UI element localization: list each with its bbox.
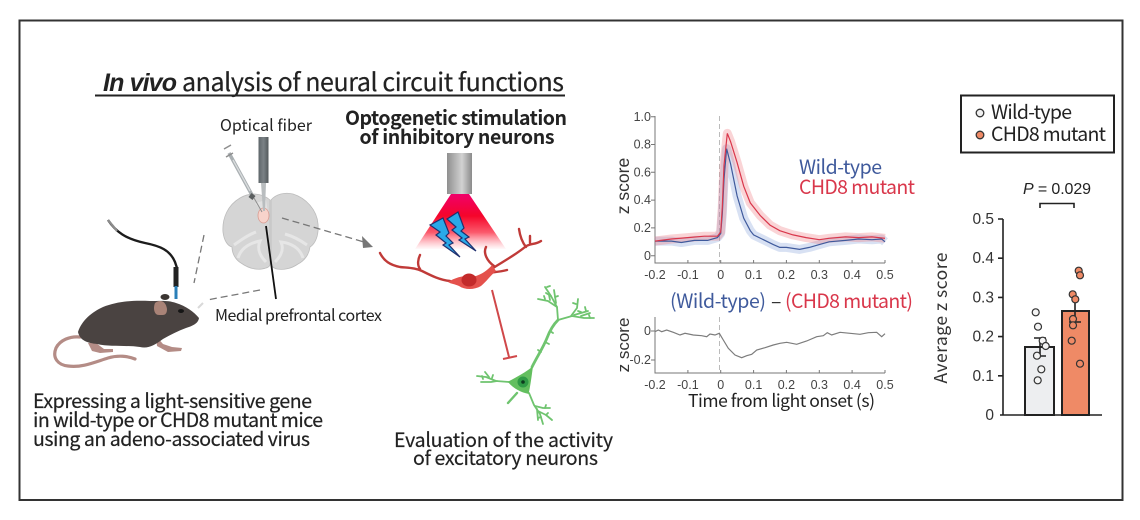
difference chart [614,285,913,413]
icon: lightning bolts [430,212,476,257]
heading: optogenetic stimulation [345,102,567,150]
y tick labels: 0.2 [634,221,651,235]
y tick labels [634,110,651,263]
y tick labels: 0.2 [972,328,994,346]
icon: brain coronal section [223,193,318,269]
icon: syringe [224,145,262,212]
x tick labels: 0 [717,378,724,392]
mutant error band [655,133,885,241]
x tick labels: 0.2 [778,268,795,282]
x tick labels: -0.2 [644,378,666,392]
arrow: brain to optogenetic stimulation [282,218,373,248]
y tick labels: 0 [985,407,994,424]
x tick labels: 0.3 [811,268,828,282]
error bars [1034,302,1081,356]
x tick labels: -0.2 [644,268,666,282]
title: In vivo [103,69,177,97]
mutant label: CHD8 mutant [991,118,1107,147]
line chart: z score over time [613,110,916,282]
wild-type mean [655,149,885,249]
caption: evaluation: of excitatory neurons [413,442,598,471]
wild-type data points [1032,309,1049,384]
y axis title: Average z score [928,252,953,384]
light cone [415,194,506,249]
y tick labels [972,211,994,424]
icon: optical cable [108,220,178,299]
wild-type label: Wild-type [991,96,1072,125]
axes [651,116,885,263]
x tick labels: 0.4 [843,268,861,282]
heading: optogenetic stimulation: Optogenetic stimulation [345,102,567,131]
x tick labels: 0.5 [876,268,894,282]
icon: excitatory neuron [477,286,594,424]
zoom guide: upper dashed line [194,235,204,283]
legend: CHD8 mutant: CHD8 mutant [799,171,916,200]
chart heading: (CHD8 mutant) [785,285,913,314]
label: medial prefrontal cortex: Medial prefrontal cortex [215,302,382,326]
wild-type error band [655,149,885,249]
caption: expressing gene: in wild-type or CHD8 mutant mice [33,404,323,433]
y tick labels: 0.6 [634,165,651,179]
mutant bar [1062,311,1089,415]
chart heading [670,285,913,314]
x tick labels: 0.1 [745,268,762,282]
heading: optogenetic stimulation: of inhibitory neurons [360,121,554,150]
icon: optical fiber [258,137,268,211]
x tick labels: 0.3 [811,378,828,392]
y tick labels [629,324,651,367]
icon: light source [447,153,472,194]
icon: inhibitory neuron [380,229,541,289]
light onset line [718,116,720,263]
chart heading: (Wild-type) [670,285,766,314]
mutant marker [976,131,984,139]
y tick labels: 0.1 [972,368,994,385]
axes [998,219,1102,415]
x tick labels [644,268,894,282]
axes [651,317,885,373]
x tick labels: 0.4 [843,378,861,392]
mutant mean [655,133,885,241]
caption: expressing gene [33,385,323,452]
y tick labels: 0 [644,324,651,338]
y tick labels: 0.4 [634,193,651,207]
mutant data points [1068,267,1084,367]
light onset line [718,317,720,373]
inhibition symbol [492,290,517,359]
x tick labels: -0.1 [677,268,699,282]
significance label: P = 0.029 [1023,181,1091,198]
zoom guide: lower dashed line [207,290,260,300]
x tick labels: 0.5 [876,378,894,392]
x tick labels: 0 [717,268,724,282]
y tick labels: 0.3 [972,290,994,306]
wild-type bar [1025,347,1054,415]
caption: evaluation: Evaluation of the activity [394,424,613,453]
y tick labels: 0 [644,249,651,263]
leader line to cortex label [266,226,276,299]
caption: expressing gene: using an adeno-associated virus [33,423,310,452]
caption: expressing gene: Expressing a light-sensitive gene [33,385,312,414]
y axis title: z score [614,318,633,372]
y tick labels: 0.5 [972,211,994,228]
x axis title: Time from light onset (s) [688,388,875,413]
x tick labels [644,378,894,392]
label: optical fiber: Optical fiber [220,112,313,136]
wild-type marker [976,109,984,117]
y tick labels: 0.8 [634,138,651,152]
title: analysis of neural circuit functions [182,63,564,99]
x tick labels: 0.1 [745,378,762,392]
bar chart: average z score [928,181,1102,424]
legend: wild-type: Wild-type [799,151,882,180]
chart heading: – [771,285,781,314]
panel: stimulation of inhibitory neuron [380,153,594,424]
panel: mouse and fiber implant [55,220,260,366]
y tick labels: 0.4 [972,250,994,267]
y tick labels: -0.2 [629,353,651,367]
caption: evaluation [394,424,613,471]
panel: brain section [215,112,382,326]
icon: mouse [55,294,203,366]
x tick labels: -0.1 [677,378,699,392]
y axis title: z score [613,158,633,214]
x tick labels: 0.2 [778,378,795,392]
y tick labels: 1.0 [634,110,651,124]
difference line [655,330,885,358]
legend box [961,96,1114,152]
significance bracket [1040,204,1074,208]
